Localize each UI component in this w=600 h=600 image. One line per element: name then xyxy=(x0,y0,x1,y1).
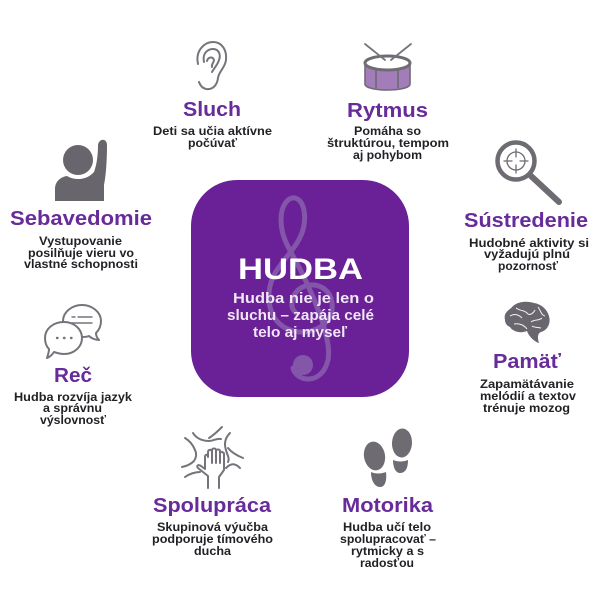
heading: HUDBA: HUDBA xyxy=(238,253,363,286)
description: ducha xyxy=(194,546,232,558)
heading: Pamäť xyxy=(493,351,561,373)
icon: treble clef watermark xyxy=(269,198,332,379)
description xyxy=(14,392,133,427)
heading: Sústredenie xyxy=(464,210,588,232)
description: posilňuje vieru vo xyxy=(28,248,134,260)
item: Sústredenie xyxy=(464,142,589,273)
description: Hudba rozvíja jazyk xyxy=(14,392,133,404)
central description: telo aj myseľ xyxy=(253,325,347,341)
description xyxy=(469,238,589,273)
description xyxy=(340,522,437,570)
heading: Sebavedomie xyxy=(10,208,152,230)
description xyxy=(152,522,273,558)
description: Deti sa učia aktívne xyxy=(153,126,272,138)
description: Zapamätávanie xyxy=(480,379,574,391)
description: a správnu xyxy=(43,403,102,415)
description: Skupinová výučba xyxy=(157,522,269,534)
heading: Sluch xyxy=(183,99,241,121)
item: Spolupráca xyxy=(152,427,273,558)
description: rytmicky a s xyxy=(351,546,424,558)
description: aj pohybom xyxy=(353,150,422,162)
icon: magnifier with target xyxy=(498,142,559,202)
central panel: Hudba xyxy=(191,180,409,397)
description xyxy=(153,126,272,150)
description: radosťou xyxy=(360,558,414,570)
panel background xyxy=(191,180,409,397)
description: Pomáha so xyxy=(354,126,421,138)
item: Pamäť xyxy=(480,302,577,415)
description: trénuje mozog xyxy=(483,403,570,415)
description: Hudba učí telo xyxy=(343,522,431,534)
central description: sluchu – zapája celé xyxy=(227,308,374,324)
description: počúvať xyxy=(188,138,238,150)
description: spolupracovať – xyxy=(340,534,437,546)
description: podporuje tímového xyxy=(152,534,273,546)
description: Hudobné aktivity si xyxy=(469,238,589,250)
icon: footprints xyxy=(362,428,413,487)
icon: drum xyxy=(365,44,411,90)
icon: brain xyxy=(505,302,550,343)
description: melódií a textov xyxy=(480,391,577,403)
heading: Motorika xyxy=(342,495,434,517)
heading: Rytmus xyxy=(347,100,428,122)
description xyxy=(327,126,449,162)
description: výslovnosť xyxy=(40,415,107,427)
heading: Spolupráca xyxy=(153,495,272,517)
icon: speech bubbles xyxy=(45,305,101,358)
description xyxy=(480,379,577,415)
item: Sluch xyxy=(153,42,272,150)
central description: Hudba nie je len o xyxy=(233,291,374,307)
description: vyžadujú plnú xyxy=(484,249,570,261)
description: Vystupovanie xyxy=(39,236,122,248)
icon: stacked hands xyxy=(182,427,243,488)
description: pozornosť xyxy=(498,261,559,273)
central description xyxy=(227,291,374,341)
description: vlastné schopnosti xyxy=(24,259,138,271)
item: Reč xyxy=(14,305,133,427)
heading: Reč xyxy=(54,365,92,387)
item: Motorika xyxy=(340,428,437,570)
item: Rytmus xyxy=(327,44,449,162)
icon: person raising hand xyxy=(55,140,107,201)
description: štruktúrou, tempom xyxy=(327,138,449,150)
item: Sebavedomie xyxy=(10,140,152,271)
description xyxy=(24,236,138,271)
icon: ear xyxy=(197,42,226,89)
